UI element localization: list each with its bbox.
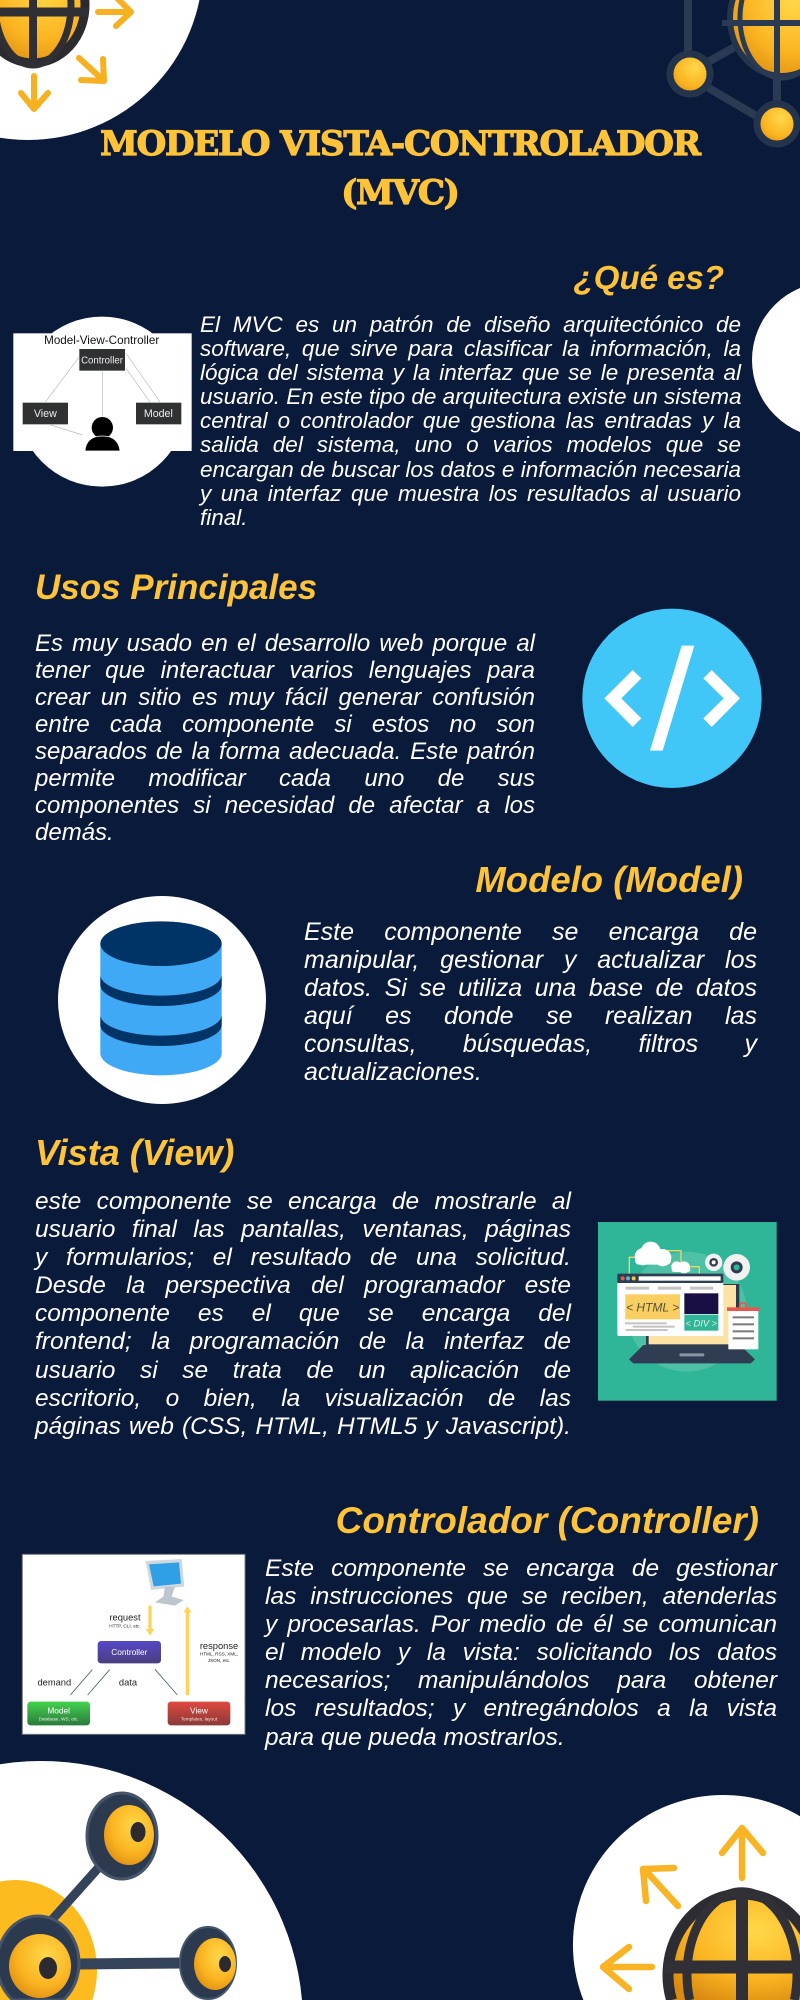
diagram: model-view-controller: Model xyxy=(144,408,173,420)
text: controlador: los resultados; y entregándolos a la vista xyxy=(265,1695,777,1722)
text: usos principales: Es muy usado en el desarrollo web porque al xyxy=(35,630,535,657)
diagram: request flow: View xyxy=(190,1706,209,1716)
panel: controlador xyxy=(22,1500,778,1751)
white blob: top left xyxy=(0,0,203,140)
diagram: request flow: HTML, RSS, XML, xyxy=(200,1652,238,1657)
text: vista: páginas web (CSS, HTML, HTML5 y Javascript). xyxy=(35,1413,571,1440)
text: modelo: manipular, gestionar y actualizar los xyxy=(304,946,757,974)
text: modelo: aquí es donde se realizan las xyxy=(304,1002,757,1030)
title: (MVC) xyxy=(341,173,459,213)
icon: database xyxy=(58,896,266,1104)
text: controlador: las instrucciones que se reciben, atenderlas xyxy=(265,1583,777,1610)
text: usos principales: tener que interactuar varios lenguajes para xyxy=(35,657,535,684)
text: qué es: y una interfaz que muestra los resultados al usuario xyxy=(200,481,741,506)
icon: code symbol xyxy=(582,608,762,788)
diagram: model-view-controller: View xyxy=(34,408,57,420)
icon: molecule network, bottom left xyxy=(0,1793,236,2000)
heading: modelo: Modelo (Model) xyxy=(475,859,743,900)
text: vista: y formularios; el resultado de una solicitud. xyxy=(35,1244,571,1271)
text: vista: este componente se encarga de mostrarle al xyxy=(35,1188,571,1215)
text: usos principales: componentes si necesidad de afectar a los xyxy=(35,792,535,819)
icon: globe with arrows, bottom right xyxy=(603,1828,800,2000)
diagram: request flow: Database, WS, etc. xyxy=(39,1717,79,1722)
diagram: model-view-controller: Controller xyxy=(81,355,124,366)
white blob: bottom left xyxy=(0,1761,302,2000)
heading: qué es: ¿Qué es? xyxy=(574,259,724,296)
illustration: web development laptop: < HTML > xyxy=(626,1301,679,1315)
diagram: request flow: Model xyxy=(47,1706,70,1716)
text: vista: componente es el que se encarga del xyxy=(35,1300,571,1327)
text: vista: usuario si se trata de un aplicación de xyxy=(35,1357,571,1384)
text: usos principales: demás. xyxy=(35,819,114,846)
text: qué es: lógica del sistema y la interfaz que se le presenta al xyxy=(200,360,741,385)
heading: vista: Vista (View) xyxy=(35,1132,234,1173)
text: qué es: central o controlador que gestiona las entradas y la xyxy=(200,408,741,433)
heading: controlador: Controlador (Controller) xyxy=(336,1500,759,1541)
text: modelo xyxy=(304,918,758,1086)
icon: network globe, top right xyxy=(670,0,800,144)
white circle: right edge xyxy=(752,282,800,438)
text: vista: usuario final las pantallas, ventanas, páginas xyxy=(35,1216,571,1243)
icon: globe with arrows, top left xyxy=(0,0,131,109)
panel: modelo xyxy=(58,859,758,1104)
text: usos principales: permite modificar cada uno de sus xyxy=(35,765,535,792)
title: MODELO VISTA-CONTROLADOR xyxy=(100,124,700,164)
text: vista: frontend; la programación de la interfaz de xyxy=(35,1328,571,1355)
diagram: model-view-controller: Model-View-Controller xyxy=(44,334,159,347)
diagram: request flow: response xyxy=(200,1641,238,1651)
text: vista: Desde la perspectiva del programador este xyxy=(35,1272,571,1299)
text: qué es: salida del sistema, uno o varios modelos que se xyxy=(200,432,741,457)
text: controlador xyxy=(264,1555,778,1751)
text: qué es: final. xyxy=(200,505,248,530)
text: usos principales xyxy=(34,630,536,846)
text: modelo: consultas, búsquedas, filtros y xyxy=(304,1030,757,1058)
panel: usos principales xyxy=(34,568,762,846)
text: vista: escritorio, o bien, la visualización de las xyxy=(35,1385,571,1412)
text: usos principales: crear un sitio es muy fácil generar confusión xyxy=(35,684,535,711)
text: usos principales: separados de la forma adecuada. Este patrón xyxy=(35,738,535,765)
text: controlador: y procesarlas. Por medio de él se comunican xyxy=(265,1611,777,1638)
text: controlador: para que pueda mostrarlos. xyxy=(265,1724,565,1751)
text: modelo: Este componente se encarga de xyxy=(304,918,757,946)
text: vista xyxy=(34,1188,572,1440)
white blob: bottom right xyxy=(573,1795,800,2000)
illustration: web development laptop xyxy=(598,1222,777,1401)
text: qué es: software, que sirve para clasificar la información, la xyxy=(200,336,741,361)
diagram: model-view-controller xyxy=(13,316,192,487)
text: usos principales: entre cada componente si estos no son xyxy=(35,711,535,738)
panel: qué es xyxy=(13,259,742,530)
illustration: web development laptop: < DIV > xyxy=(686,1319,718,1329)
diagram: request flow: data xyxy=(119,1677,138,1687)
panel: vista xyxy=(34,1132,777,1440)
diagram: request flow: Controller xyxy=(111,1647,148,1657)
text: modelo: actualizaciones. xyxy=(304,1058,482,1086)
text: qué es: encargan de buscar los datos e información necesaria xyxy=(200,457,741,482)
text: controlador: Este componente se encarga de gestionar xyxy=(265,1555,777,1582)
title xyxy=(100,124,702,213)
diagram: request flow: Templates, layout xyxy=(181,1717,218,1722)
text: qué es: El MVC es un patrón de diseño arquitectónico de xyxy=(200,312,741,337)
text: controlador: el modelo y la vista: solicitando los datos xyxy=(265,1639,777,1666)
text: modelo: datos. Si se utiliza una base de datos xyxy=(304,974,757,1002)
diagram: request flow xyxy=(22,1554,246,1735)
diagram: request flow: request xyxy=(109,1612,141,1622)
diagram: request flow: HTTP, CLI, etc. xyxy=(109,1623,141,1628)
text: controlador: necesarios; manipulándolos para obtener xyxy=(265,1667,777,1694)
text: qué es xyxy=(198,312,742,530)
diagram: request flow: JSON, etc. xyxy=(208,1658,230,1663)
diagram: request flow: demand xyxy=(37,1677,71,1687)
text: qué es: usuario. En este tipo de arquitectura existe un sistema xyxy=(200,384,742,409)
heading: usos principales: Usos Principales xyxy=(35,568,317,607)
